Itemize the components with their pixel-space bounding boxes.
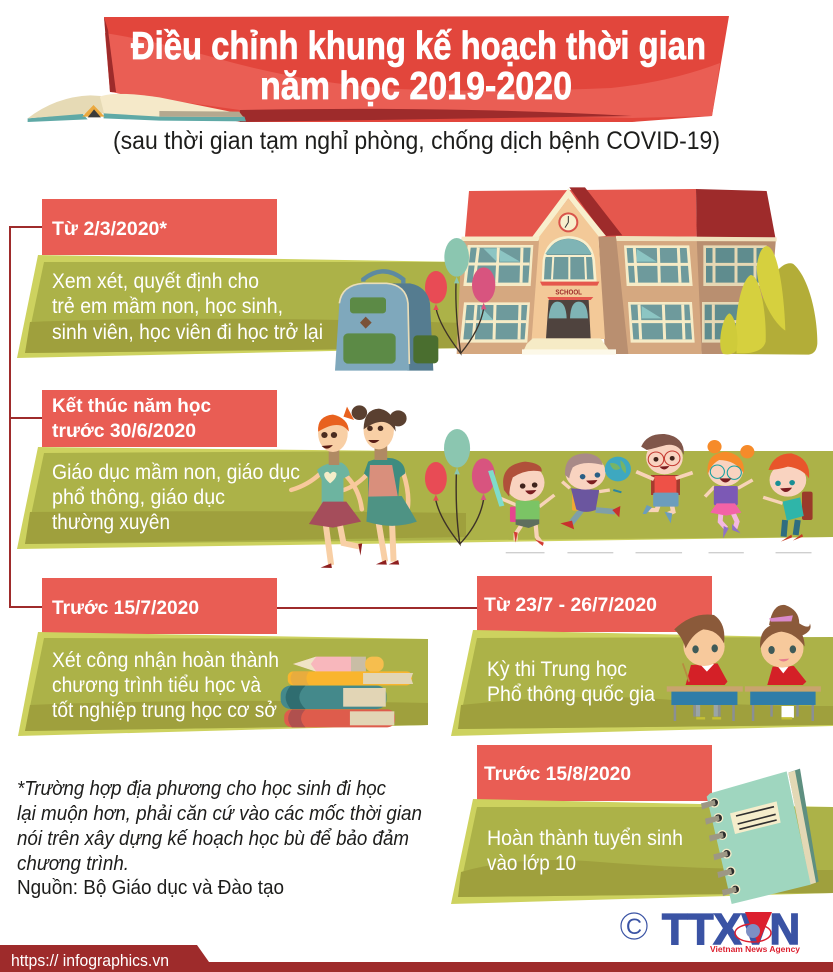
panel: từ 2/3/2020 bbox=[17, 199, 465, 358]
date tab bbox=[477, 576, 712, 632]
date label bbox=[52, 395, 211, 442]
body text: panel 3: chương trình tiểu học và bbox=[52, 674, 261, 697]
title banner bbox=[104, 16, 729, 122]
icon: open book bbox=[28, 94, 246, 122]
clock bbox=[558, 212, 578, 232]
body text: panel 3 bbox=[52, 649, 279, 722]
footnote: chương trình. bbox=[17, 853, 129, 875]
date label: Từ 2/3/2020* bbox=[52, 218, 167, 240]
body text: panel 5: vào lớp 10 bbox=[487, 852, 576, 875]
child with glasses bbox=[636, 434, 693, 523]
body text: panel 3: tốt nghiệp trung học cơ sở bbox=[52, 699, 277, 722]
panel: từ 23/7 - 26/7/2020 bbox=[451, 576, 833, 736]
footnote bbox=[17, 778, 422, 899]
boy with book bbox=[763, 453, 813, 542]
green panel bbox=[451, 630, 833, 736]
body text: panel 4: Phổ thông quốc gia bbox=[487, 683, 655, 706]
arched window bbox=[542, 236, 597, 282]
illustration: school building bbox=[457, 187, 817, 355]
body text: panel 2: Giáo dục mầm non, giáo dục bbox=[52, 461, 300, 484]
child with ruler bbox=[488, 462, 554, 546]
ground shadows bbox=[506, 551, 812, 555]
green panel bbox=[451, 799, 833, 904]
girl with orange hair bbox=[705, 440, 754, 538]
title text: Điều chỉnh khung kế hoạch thời gian bbox=[131, 25, 706, 68]
illustration: five jumping children bbox=[488, 434, 813, 553]
body text: panel 2: thường xuyên bbox=[52, 511, 170, 534]
boy student bbox=[667, 614, 743, 721]
date label: Trước 15/7/2020 bbox=[52, 597, 199, 619]
timeline connector bbox=[10, 227, 477, 608]
date tab bbox=[42, 390, 277, 447]
footer url: https:// infographics.vn bbox=[11, 951, 169, 970]
school sign and door bbox=[522, 282, 616, 355]
date label: trước 30/6/2020 bbox=[52, 420, 196, 442]
illustration: two girls bbox=[291, 405, 417, 568]
footnote: *Trường hợp địa phương cho học sinh đi học bbox=[17, 778, 386, 800]
panel: kết thúc năm học bbox=[17, 390, 833, 549]
body text: panel 3: Xét công nhận hoàn thành bbox=[52, 649, 279, 672]
footer bar bbox=[0, 945, 833, 972]
body text: panel 1: Xem xét, quyết định cho bbox=[52, 270, 259, 293]
bush bbox=[720, 246, 817, 355]
illustration: two students at desks bbox=[667, 605, 821, 721]
subtitle: (sau thời gian tạm nghỉ phòng, chống dịch bệnh COVID-19) bbox=[113, 127, 720, 155]
panel: trước 15/8/2020 bbox=[451, 745, 833, 904]
spiral rings bbox=[701, 798, 740, 896]
date tab bbox=[42, 578, 277, 634]
body text: panel 2 bbox=[52, 461, 300, 534]
body text: panel 4: Kỳ thi Trung học bbox=[487, 658, 627, 681]
footnote: lại muộn hơn, phải căn cứ vào các mốc thời gian bbox=[17, 803, 422, 825]
body text: panel 5 bbox=[487, 827, 683, 875]
illustration: backpack bbox=[335, 271, 438, 371]
copyright mark bbox=[621, 913, 647, 939]
body text: panel 2: phổ thông, giáo dục bbox=[52, 486, 225, 509]
green panel bbox=[17, 255, 465, 358]
windows bbox=[460, 245, 767, 343]
logo: TTXVN: TTXVN bbox=[662, 905, 800, 954]
body text: panel 4 bbox=[487, 658, 655, 706]
green panel bbox=[17, 447, 833, 549]
body text: panel 5: Hoàn thành tuyển sinh bbox=[487, 827, 683, 850]
school sign and door: SCHOOL bbox=[555, 289, 583, 296]
date label: Từ 23/7 - 26/7/2020 bbox=[484, 594, 657, 616]
copyright mark: C bbox=[626, 914, 642, 939]
date label: Trước 15/8/2020 bbox=[484, 763, 631, 785]
illustration: pencil and stacked books bbox=[281, 657, 413, 727]
footnote: nói trên xây dựng kế hoạch học bù để bảo đảm bbox=[17, 828, 409, 850]
child with globe bbox=[560, 453, 631, 529]
icon: spiral notebook bbox=[701, 769, 819, 904]
panel: trước 15/7/2020 bbox=[18, 578, 428, 736]
body text: panel 1: sinh viên, học viên đi học trở lại bbox=[52, 321, 323, 344]
illustration: balloons 1 bbox=[425, 238, 495, 353]
body text: panel 1: trẻ em mầm non, học sinh, bbox=[52, 295, 283, 318]
body text: panel 1 bbox=[52, 270, 323, 344]
source line: Nguồn: Bộ Giáo dục và Đào tạo bbox=[17, 877, 284, 899]
logo: TTXVN: Vietnam News Agency bbox=[710, 944, 800, 954]
date tab bbox=[477, 745, 712, 801]
illustration: balloons 2 bbox=[425, 429, 495, 544]
date label: Kết thúc năm học bbox=[52, 395, 211, 417]
title text line 2: năm học 2019-2020 bbox=[260, 65, 572, 108]
date tab bbox=[42, 199, 277, 255]
girl student bbox=[745, 605, 821, 721]
green panel bbox=[18, 632, 428, 736]
